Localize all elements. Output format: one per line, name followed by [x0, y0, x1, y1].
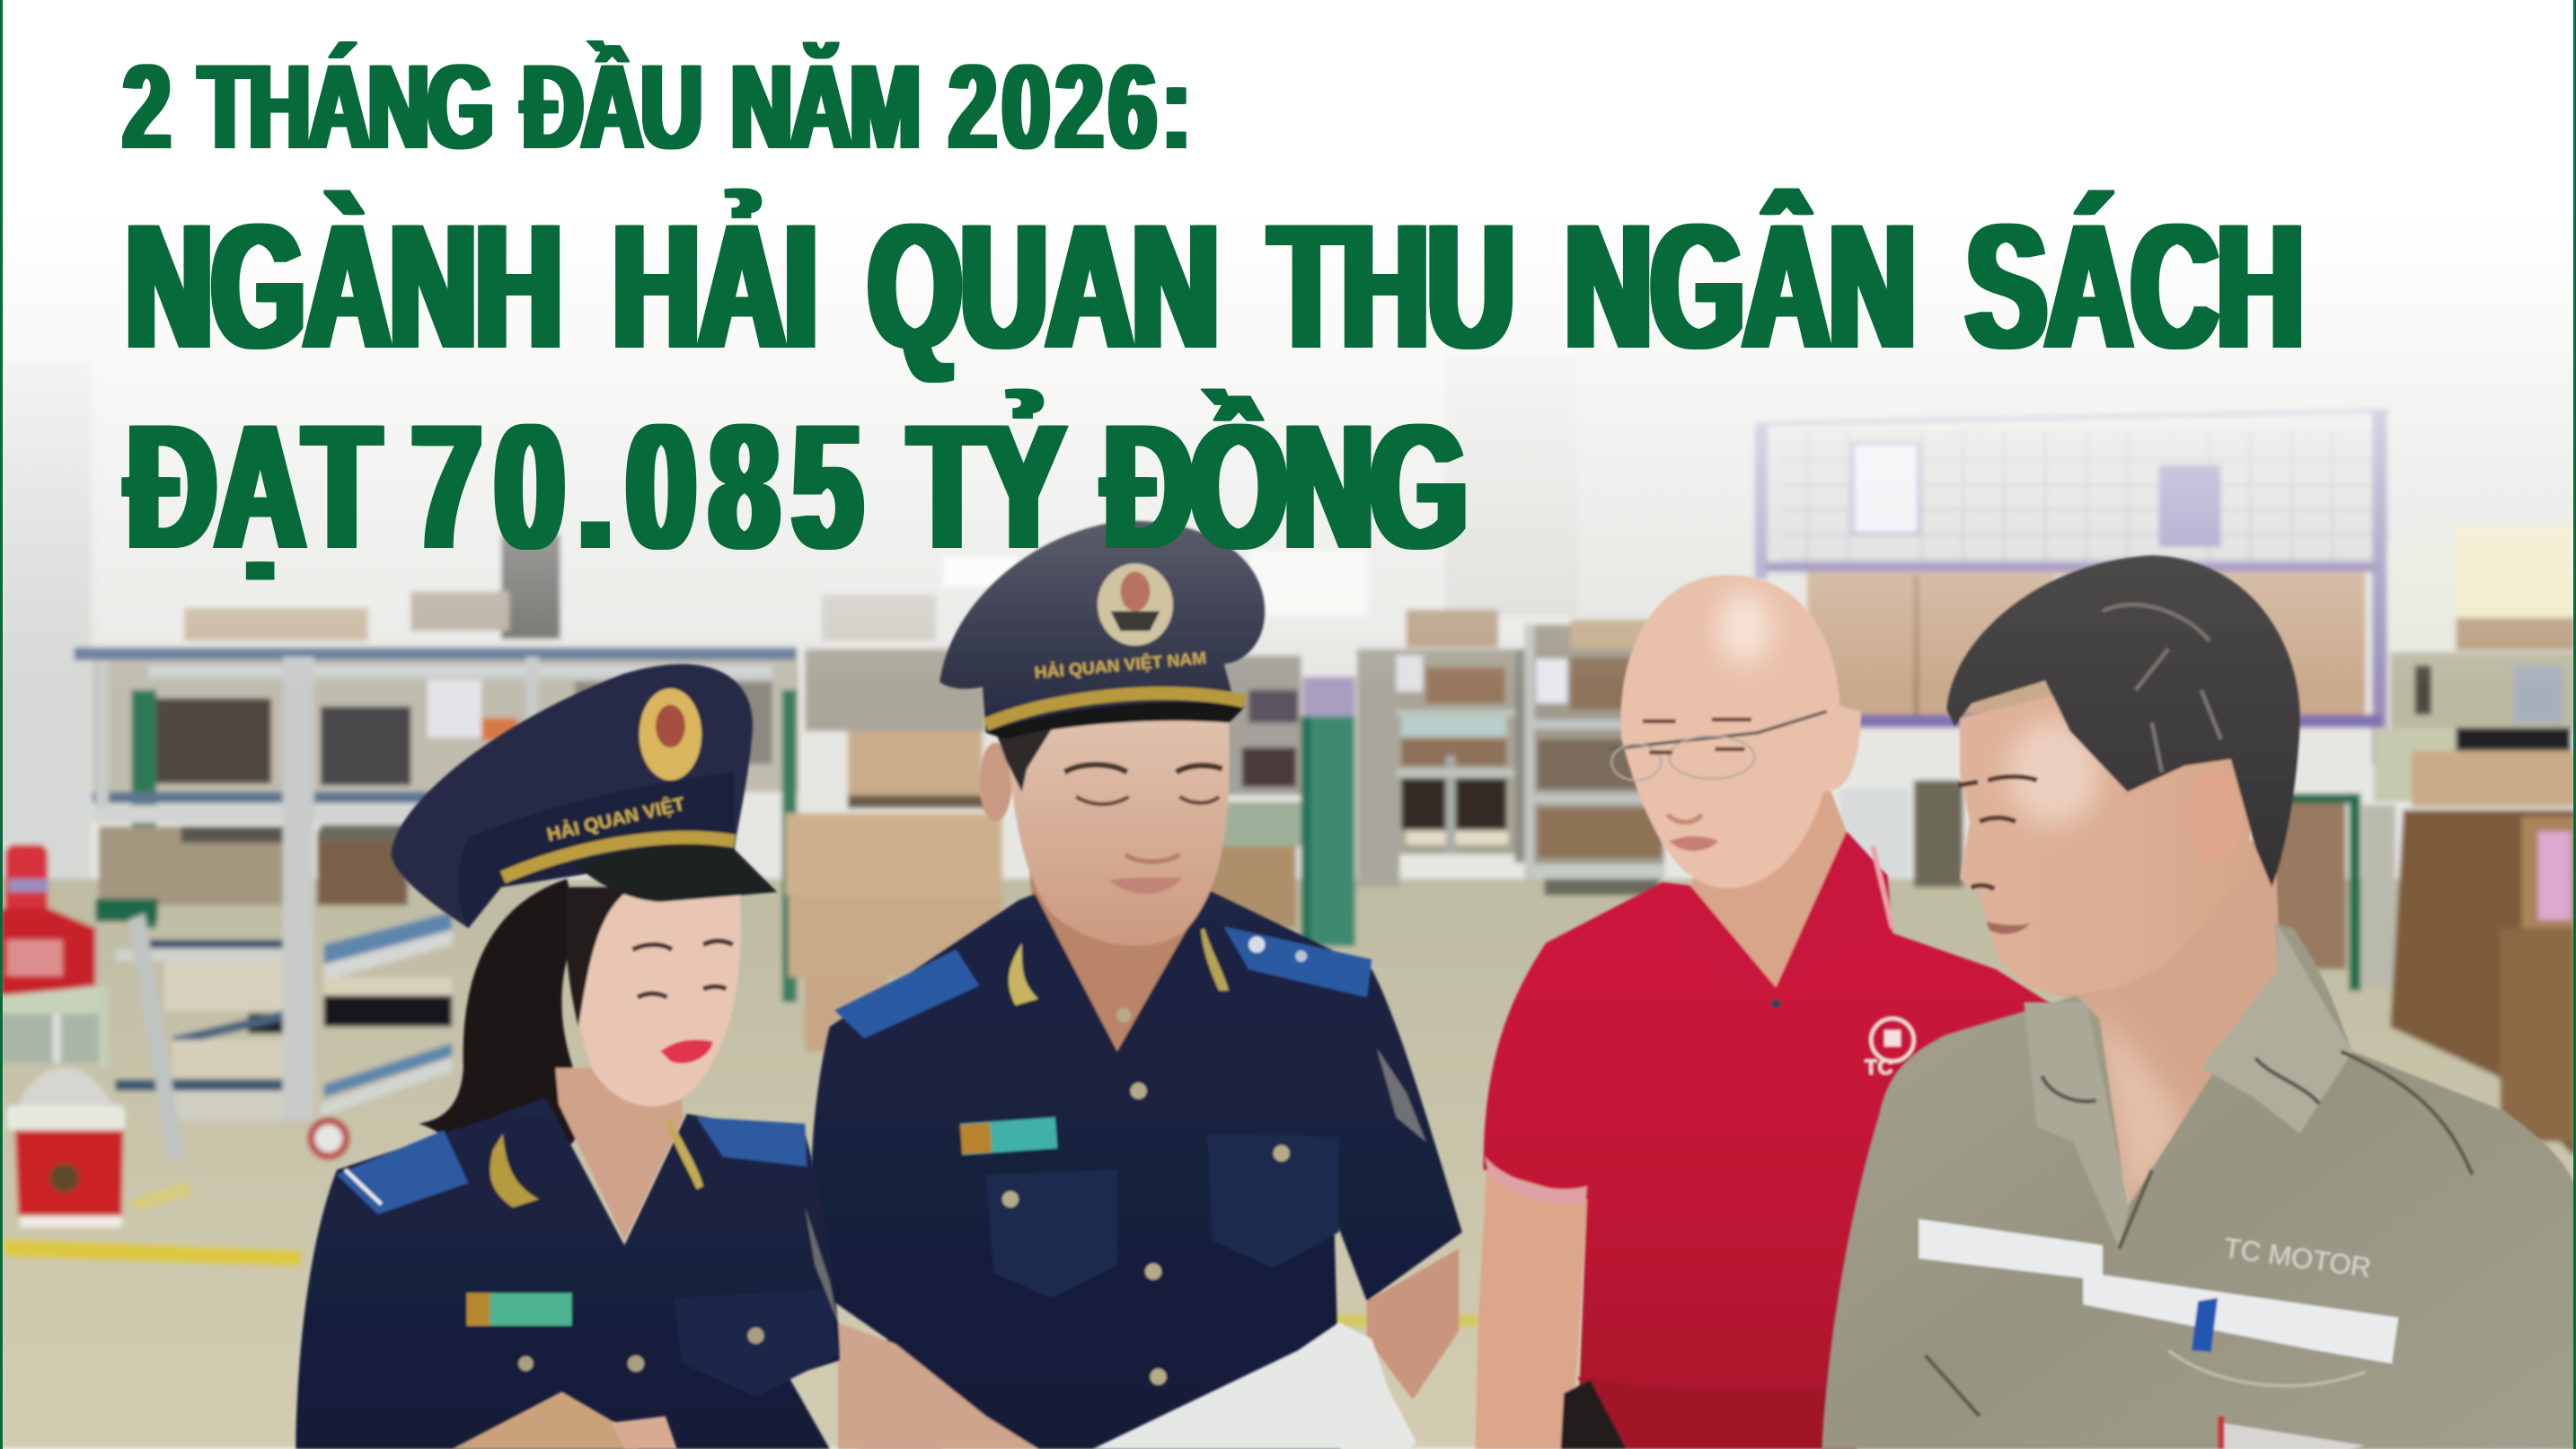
name badge: [467, 1293, 572, 1326]
forearms: [838, 1322, 1038, 1449]
person: man in red polo shirt: [1475, 575, 2053, 1449]
face: [1960, 658, 2254, 994]
person: worker in grey jacket: [1822, 555, 2576, 1449]
name badge: [960, 1118, 1057, 1155]
shoulder straps: [337, 1130, 468, 1214]
purple wire cage with boxes: [1754, 411, 2390, 764]
person: male customs officer: [811, 521, 1462, 1449]
shirt hem: [1577, 1377, 1857, 1449]
face: [569, 884, 741, 1107]
chest pocket: [2168, 1350, 2366, 1386]
buttons: [518, 1328, 764, 1372]
hair strand: [565, 888, 632, 1027]
ear: [979, 743, 1012, 821]
buttons: [1002, 1008, 1290, 1385]
title: eyebrow line: 2 THÁNG ĐẦU NĂM 2026:: [123, 40, 1196, 174]
face: [1005, 713, 1230, 946]
work jacket: [1822, 923, 2576, 1449]
officer uniform: [296, 1098, 840, 1449]
title: main line 2: ĐẠT 70.085 TỶ ĐỒNG: [127, 387, 1464, 586]
reflective strip: [1919, 1219, 2398, 1364]
head: [1620, 575, 1861, 888]
officer uniform: [811, 890, 1462, 1449]
bare arm: [1475, 1170, 1587, 1449]
cap visor: [575, 843, 777, 902]
sideburn: [995, 729, 1052, 791]
peaked cap: [940, 521, 1265, 733]
gold cord: [986, 694, 1245, 724]
hand of female officer: [612, 1416, 677, 1449]
jacket collars: [2024, 1003, 2129, 1249]
forehead highlight: [2007, 720, 2099, 825]
peaked cap: [391, 664, 753, 928]
person: female customs officer: [296, 664, 840, 1449]
fire extinguisher and red crate: [0, 844, 109, 1068]
cardboard held by female officer: [452, 1392, 640, 1449]
cardboard boxes behind officers: [785, 726, 1002, 1051]
red paint bucket: [7, 1068, 125, 1227]
ear: [2190, 771, 2243, 859]
white fade at top of photo: [0, 0, 2576, 690]
neck: [555, 1068, 684, 1241]
neck: [1027, 821, 1213, 1051]
polo shirt: [1484, 831, 2053, 1449]
shirt logo: TC: [1865, 1056, 1893, 1080]
facial features: [632, 941, 733, 997]
neck: [1690, 773, 1847, 987]
left shelving racks: [75, 608, 798, 1160]
left green edge: [0, 0, 3, 1449]
cap emblem: [1098, 563, 1173, 646]
facial features: [1064, 764, 1222, 773]
title: main line 1: NGÀNH HẢI QUAN THU NGÂN SÁCH: [126, 187, 2303, 385]
hair: [1946, 555, 2300, 888]
jacket seams: [1926, 1051, 2473, 1416]
yellow floor marking: [4, 1239, 301, 1267]
pen: [2192, 1298, 2218, 1352]
pocket tag: [2221, 1423, 2366, 1449]
right green edge: [2573, 0, 2576, 1449]
gold cord: [503, 837, 735, 878]
collar: [1666, 831, 1888, 991]
sleeve cuff: [1485, 1156, 1587, 1204]
pocket: [674, 1290, 838, 1396]
left pillar: [0, 361, 91, 928]
warehouse floor: [0, 879, 2576, 1449]
belt bag: [1561, 1380, 1627, 1449]
middle racks and green cages: [805, 609, 1666, 946]
facial features: [1643, 720, 1751, 753]
cap band: [458, 773, 735, 928]
cap text: HẢI QUAN VIỆT NAM: [1034, 649, 1207, 683]
white plastic bag: [1092, 1322, 1416, 1449]
sleeve patch: [805, 1207, 838, 1322]
eyeglasses: [1610, 711, 1827, 749]
right side racks and boxes: [1839, 526, 2576, 1158]
collar insignia: [490, 1134, 539, 1207]
back wall panels: [99, 329, 2576, 641]
pockets: [986, 1134, 1339, 1298]
hand of female officer far side: [854, 1433, 945, 1449]
sleeve patch: [1377, 1048, 1426, 1142]
shirt logo: [1865, 1019, 1914, 1080]
collar insignia: [1009, 943, 1038, 1005]
cap text: HẢI QUAN VIỆT: [545, 793, 687, 845]
cap emblem: [640, 688, 701, 781]
hair: [419, 879, 595, 1193]
jacket brand: TC MOTOR: [2222, 1232, 2373, 1284]
neck and chest: [2025, 838, 2280, 1207]
facial features: [1958, 777, 2037, 888]
scalp highlight: [1718, 591, 1771, 664]
cap visor: [986, 702, 1245, 739]
shoulder straps: [834, 950, 979, 1038]
